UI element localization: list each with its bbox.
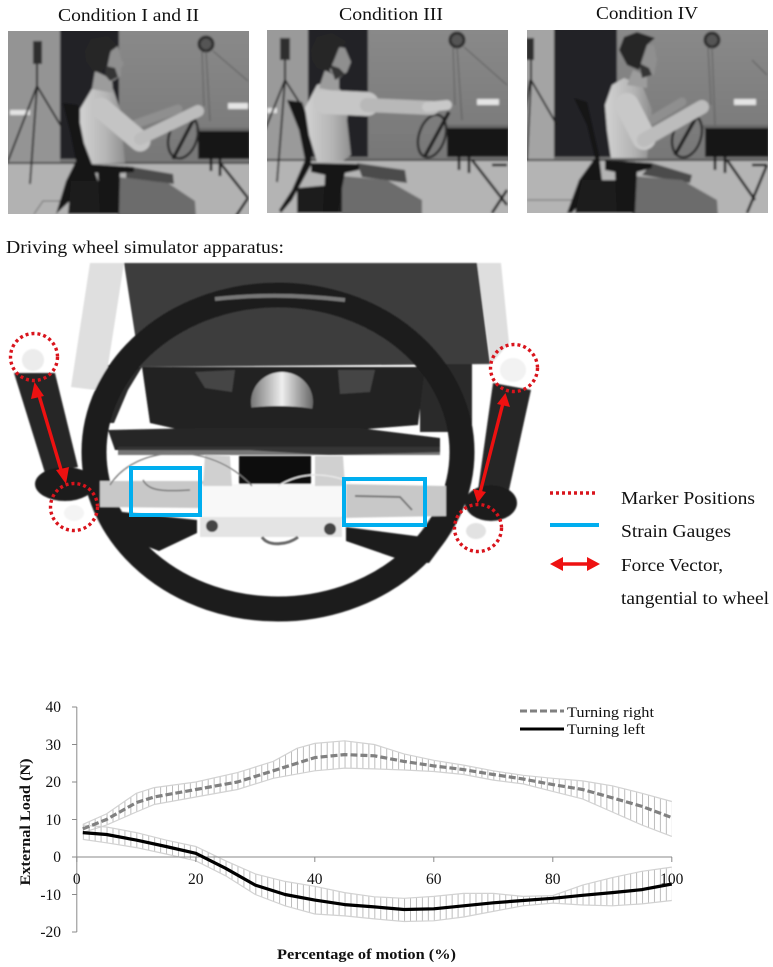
error bars: turning right (83, 741, 672, 836)
x axis tick labels: 40 (307, 871, 323, 888)
force arrow: left grip (31, 382, 69, 484)
y axis tick labels: 20 (46, 774, 61, 791)
force arrow: right grip (473, 393, 510, 503)
chart legend: Turning left (567, 722, 645, 738)
legend item: force vector: Force Vector, (621, 555, 723, 575)
series: turning right (83, 755, 672, 829)
legend item: force vector (550, 555, 769, 608)
x axis tick labels: 100 (660, 871, 684, 888)
photo: steering wheel apparatus (10, 263, 538, 609)
strain gauge box: left (131, 468, 200, 515)
legend item: strain gauges: Strain Gauges (621, 521, 731, 541)
strain gauge box: right (344, 479, 425, 525)
photo: Condition III posture (267, 30, 508, 213)
y axis tick labels: 40 (46, 699, 61, 716)
x axis tick labels: 60 (426, 871, 442, 888)
line chart: external load vs percentage of motion (18, 699, 684, 963)
legend item: force vector: tangential to wheel (621, 588, 769, 608)
chart legend: Turning right (567, 705, 654, 721)
photo: Condition I and II posture (8, 31, 249, 214)
axes (72, 707, 672, 932)
x axis tick labels (73, 871, 684, 888)
chart legend (520, 705, 654, 738)
legend: apparatus (550, 488, 769, 608)
y axis tick labels: -10 (40, 887, 61, 904)
text: apparatus caption: Driving wheel simulator apparatus: (6, 237, 284, 257)
legend item: marker positions: Marker Positions (621, 488, 755, 508)
y axis tick labels: 0 (53, 849, 61, 866)
y axis tick labels: 30 (46, 737, 61, 754)
y axis title: External Load (N) (18, 758, 34, 885)
series: turning left (83, 833, 672, 910)
y axis tick labels: 10 (46, 812, 61, 829)
error bars: turning left (83, 825, 672, 922)
heading: Condition IV: Condition IV (596, 3, 698, 23)
photo: Condition IV posture (527, 30, 768, 213)
x axis tick labels: 20 (188, 871, 204, 888)
marker circles (10, 334, 538, 552)
heading: Condition I and II: Condition I and II (58, 5, 199, 25)
heading: Condition III: Condition III (339, 4, 443, 24)
x axis tick labels: 0 (73, 871, 81, 888)
x axis tick labels: 80 (545, 871, 561, 888)
x axis title: Percentage of motion (%) (277, 947, 456, 963)
y axis tick labels (40, 699, 61, 941)
y axis tick labels: -20 (40, 924, 61, 941)
